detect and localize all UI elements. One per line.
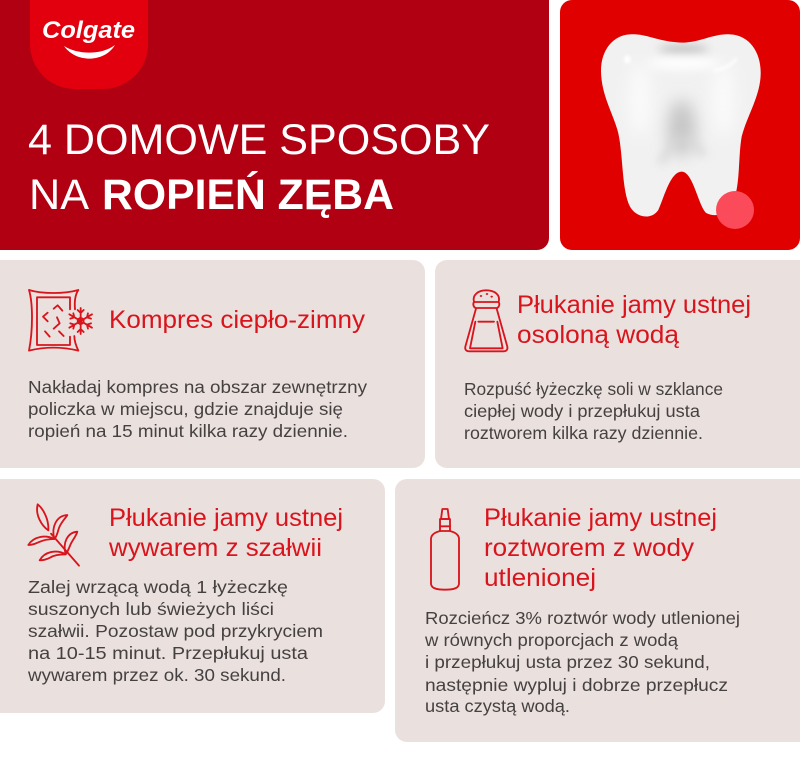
text block: Rozcieńcz 3% roztwór wody utlenionej: [425, 608, 740, 628]
heading: utlenionej: [484, 564, 596, 592]
heading: Płukanie jamy ustnej: [109, 504, 343, 532]
text block: Zalej wrzącą wodą 1 łyżeczkę: [28, 577, 288, 597]
text block: [27, 577, 323, 685]
Colgate logo: [30, 0, 148, 89]
heading: Płukanie jamy ustnej: [517, 291, 751, 319]
heading: roztworem z wody: [484, 534, 695, 562]
text block: policzka w miejscu, gdzie znajduje się: [28, 399, 343, 419]
heading: Płukanie jamy ustnej: [484, 504, 717, 532]
Colgate logo: Colgate: [42, 17, 135, 44]
text block: szałwii. Pozostaw pod przykryciem: [28, 621, 323, 641]
heading: osoloną wodą: [517, 321, 679, 349]
heading: [108, 504, 343, 562]
text block: wywarem przez ok. 30 sekund.: [27, 665, 286, 685]
text block: usta czystą wodą.: [425, 696, 570, 716]
text block: suszonych lub świeżych liści: [28, 599, 274, 619]
title: 4 DOMOWE SPOSOBY: [28, 116, 490, 164]
icon: sage sprig: [28, 504, 79, 566]
panel: salt water rinse: [435, 260, 800, 468]
text block: ropień na 15 minut kilka razy dziennie.: [28, 421, 348, 441]
header panel: [0, 0, 549, 250]
icon: compress and snowflake: [29, 290, 92, 351]
text block: następnie wypluj i dobrze przepłucz: [425, 675, 728, 695]
text block: [424, 608, 740, 716]
text block: na 10-15 minut. Przepłukuj usta: [28, 643, 308, 663]
icon: salt shaker: [465, 290, 507, 351]
tooth panel: [560, 0, 800, 250]
text block: ciepłej wody i przepłukuj usta: [464, 401, 700, 421]
text block: [28, 377, 367, 441]
text block: roztworem kilka razy dziennie.: [464, 423, 703, 443]
text block: Rozpuść łyżeczkę soli w szklance: [464, 379, 723, 399]
abscess dot: [716, 191, 754, 229]
icon: bottle: [431, 509, 459, 590]
heading: [484, 504, 717, 592]
text block: w równych proporcjach z wodą: [424, 630, 678, 650]
icon: tooth: [601, 34, 761, 217]
text block: [464, 379, 723, 443]
heading: wywarem z szałwii: [108, 534, 322, 562]
heading: [517, 291, 751, 349]
text block: Nakładaj kompres na obszar zewnętrzny: [28, 377, 367, 397]
title: ROPIEŃ ZĘBA: [102, 171, 394, 219]
panel: sage infusion rinse: [0, 479, 385, 713]
title: [28, 116, 490, 219]
panel: hot-cold compress: [0, 260, 425, 468]
title: NA: [29, 171, 89, 219]
panel: hydrogen peroxide rinse: [395, 479, 800, 742]
text block: i przepłukuj usta przez 30 sekund,: [425, 652, 710, 672]
heading: Kompres ciepło-zimny: [109, 306, 366, 334]
